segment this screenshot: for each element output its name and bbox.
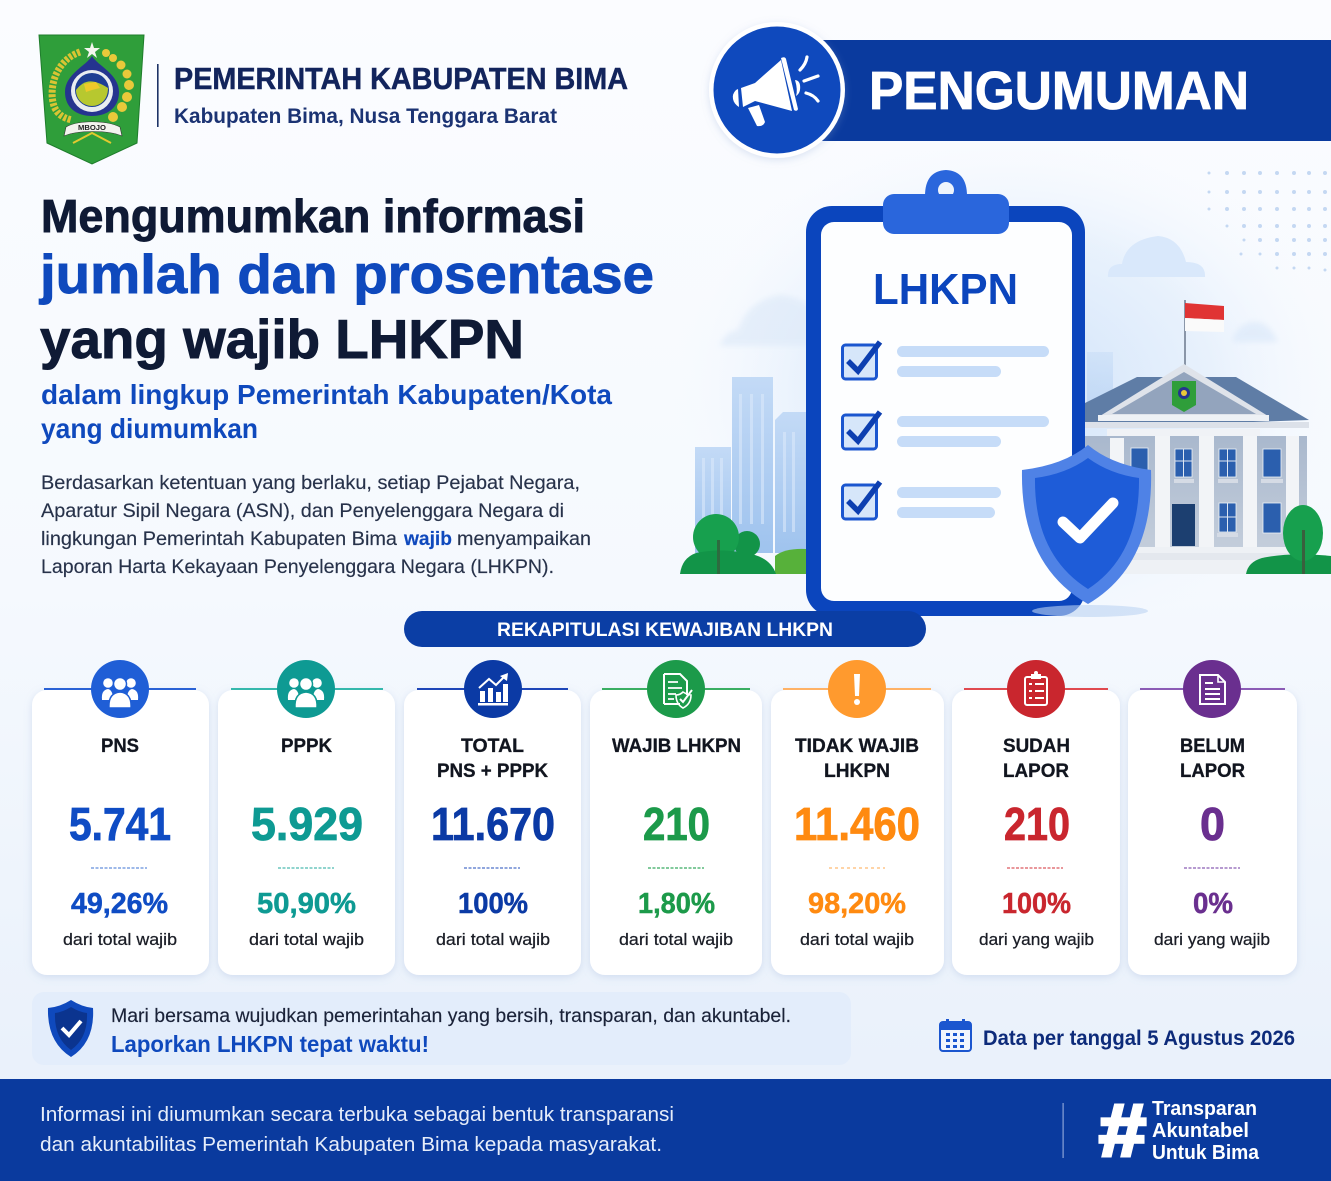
icon: growth chart xyxy=(464,660,522,718)
card: Belum Lapor: LAPOR xyxy=(1180,760,1245,782)
footer statement xyxy=(40,1103,674,1156)
card: Belum Lapor xyxy=(1128,660,1297,975)
hashtag: # xyxy=(1099,1089,1146,1172)
main heading: Mengumumkan informasi xyxy=(41,190,585,242)
card: Tidak Wajib LHKPN: TIDAK WAJIB xyxy=(795,735,919,757)
logo: Kabupaten Bima emblem xyxy=(39,35,144,164)
card: Belum Lapor: BELUM xyxy=(1180,735,1245,757)
main heading xyxy=(39,190,654,370)
main heading: jumlah dan prosentase xyxy=(39,243,654,305)
main heading: yang wajib LHKPN xyxy=(40,308,524,370)
card: Wajib LHKPN: 210 xyxy=(643,798,710,850)
icon: megaphone xyxy=(709,22,845,158)
card: PNS: 5.741 xyxy=(69,798,171,850)
card: Sudah Lapor: SUDAH xyxy=(1003,735,1070,757)
card: Wajib LHKPN: 1,80% xyxy=(638,888,715,920)
icon: document check xyxy=(647,660,705,718)
header title xyxy=(174,61,628,128)
callout: ajakan lapor: Mari bersama wujudkan pemerintahan yang bersih, transparan, dan akuntabel. xyxy=(111,1005,791,1027)
card: PPPK: 5.929 xyxy=(251,798,363,850)
illustration: left trees xyxy=(680,514,806,574)
paragraph: wajib xyxy=(403,528,452,550)
header title: Kabupaten Bima, Nusa Tenggara Barat xyxy=(174,105,557,128)
card: Sudah Lapor: 100% xyxy=(1002,888,1071,920)
card: PNS: dari total wajib xyxy=(63,931,177,949)
callout: ajakan lapor xyxy=(32,992,851,1065)
divider xyxy=(157,64,159,127)
card: PPPK: PPPK xyxy=(281,735,332,757)
subheading: yang diumumkan xyxy=(41,413,258,444)
banner: pengumuman xyxy=(822,40,1331,141)
header title: PEMERINTAH KABUPATEN BIMA xyxy=(174,61,628,96)
footer statement: dan akuntabilitas Pemerintah Kabupaten Bima kepada masyarakat. xyxy=(40,1133,662,1156)
checklist item 1 xyxy=(842,342,1049,379)
card: Belum Lapor: dari yang wajib xyxy=(1154,931,1270,949)
date label: Data per tanggal 5 Agustus 2026 xyxy=(983,1027,1295,1050)
paragraph: Laporan Harta Kekayaan Penyelenggara Negara (LHKPN). xyxy=(41,556,554,578)
footer statement: Informasi ini diumumkan secara terbuka sebagai bentuk transparansi xyxy=(40,1103,674,1126)
card: Tidak Wajib LHKPN: dari total wajib xyxy=(800,931,914,949)
icon: exclamation xyxy=(828,660,886,718)
card: Total PNS + PPPK xyxy=(404,660,581,975)
card: Total PNS + PPPK: 100% xyxy=(458,888,528,920)
card: PNS: PNS xyxy=(101,735,139,757)
card: PNS xyxy=(32,660,209,975)
card: Tidak Wajib LHKPN: LHKPN xyxy=(824,760,890,782)
section title pill: REKAPITULASI KEWAJIBAN LHKPN xyxy=(497,620,833,641)
illustration: government building xyxy=(1085,300,1309,574)
card: Belum Lapor: 0% xyxy=(1193,888,1233,920)
illustration: clipboard xyxy=(806,170,1085,616)
paragraph: menyampaikan xyxy=(457,528,591,550)
hashtag: Akuntabel xyxy=(1152,1120,1249,1142)
card: Sudah Lapor: LAPOR xyxy=(1003,760,1069,782)
paragraph xyxy=(41,472,591,578)
card: Wajib LHKPN: dari total wajib xyxy=(619,931,733,949)
checklist item 3 xyxy=(842,482,1001,519)
subheading xyxy=(41,379,612,444)
subheading: dalam lingkup Pemerintah Kabupaten/Kota xyxy=(41,379,612,410)
card: Wajib LHKPN xyxy=(590,660,762,975)
hashtag xyxy=(1099,1089,1260,1172)
decorative dot pattern xyxy=(1208,171,1327,272)
paragraph: Berdasarkan ketentuan yang berlaku, setiap Pejabat Negara, xyxy=(41,472,580,494)
icon: shield with check xyxy=(1022,445,1151,617)
card: PPPK: dari total wajib xyxy=(249,931,364,949)
hashtag: Untuk Bima xyxy=(1152,1142,1260,1164)
icon: shield xyxy=(48,1000,93,1057)
icon: document xyxy=(1183,660,1241,718)
card: Total PNS + PPPK: dari total wajib xyxy=(436,931,550,949)
card: Total PNS + PPPK: PNS + PPPK xyxy=(437,760,548,782)
paragraph: Aparatur Sipil Negara (ASN), dan Penyelenggara Negara di xyxy=(41,500,564,522)
paragraph: lingkungan Pemerintah Kabupaten Bima xyxy=(41,528,397,550)
illustration: city skyline xyxy=(695,352,1113,553)
footer xyxy=(0,1079,1331,1181)
logo: Kabupaten Bima emblem: MBOJO xyxy=(78,125,107,132)
card: Sudah Lapor: 210 xyxy=(1004,798,1070,850)
illustration: clouds xyxy=(720,236,1278,346)
section title pill xyxy=(404,611,926,647)
card: PNS: 49,26% xyxy=(71,888,168,920)
icon: people xyxy=(91,660,149,718)
icon: people xyxy=(277,660,335,718)
card: Tidak Wajib LHKPN xyxy=(771,660,944,975)
icon: clipboard list xyxy=(1007,660,1065,718)
banner: pengumuman: PENGUMUMAN xyxy=(869,61,1249,121)
card: PPPK: 50,90% xyxy=(257,888,356,920)
card: PPPK xyxy=(218,660,395,975)
card: Tidak Wajib LHKPN: 98,20% xyxy=(808,888,906,920)
card: Total PNS + PPPK: 11.670 xyxy=(431,798,555,850)
card: Sudah Lapor xyxy=(952,660,1120,975)
illustration: clipboard: LHKPN xyxy=(873,265,1018,314)
hashtag: Transparan xyxy=(1152,1098,1257,1120)
card: Belum Lapor: 0 xyxy=(1200,798,1225,850)
card: Total PNS + PPPK: TOTAL xyxy=(461,735,524,757)
icon: calendar xyxy=(940,1019,971,1051)
card: Sudah Lapor: dari yang wajib xyxy=(979,931,1094,949)
illustration: right tree xyxy=(1246,505,1331,574)
card: Tidak Wajib LHKPN: 11.460 xyxy=(794,798,920,850)
card: Wajib LHKPN: WAJIB LHKPN xyxy=(612,735,741,757)
callout: ajakan lapor: Laporkan LHKPN tepat waktu! xyxy=(111,1031,429,1057)
checklist item 2 xyxy=(842,412,1049,449)
